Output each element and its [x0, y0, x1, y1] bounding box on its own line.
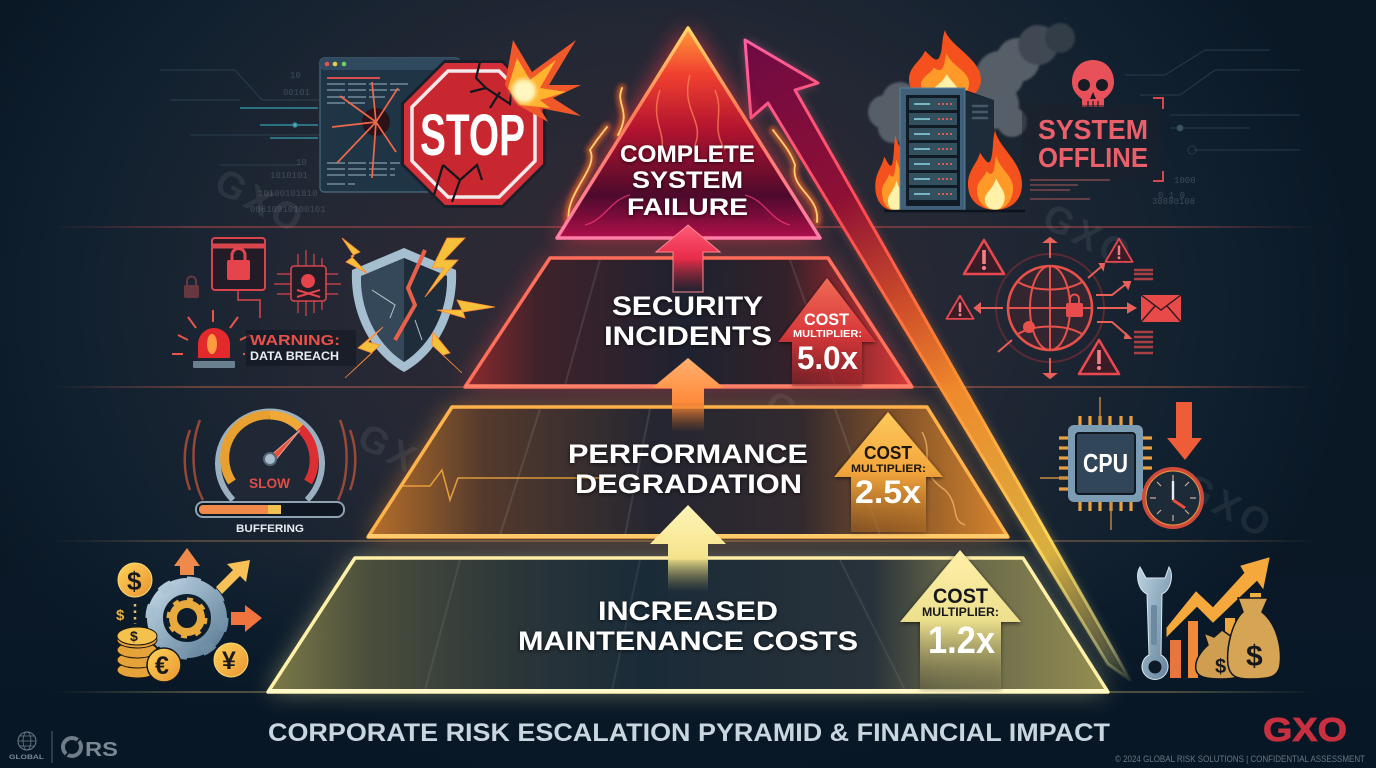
- icon: wrench with rising cost chart: $: [1215, 656, 1226, 678]
- watermarks: GXO: [351, 416, 456, 498]
- horizontal tier divider lines: [50, 227, 1320, 692]
- icon: cpu: CPU: [1083, 448, 1128, 478]
- money bags: [1196, 598, 1280, 679]
- side flames: [568, 88, 817, 228]
- binary code decoration: 10100101010: [258, 189, 317, 199]
- label tier 3: PERFORMANCE: [568, 439, 808, 469]
- watermarks: GXO: [1176, 466, 1281, 548]
- label tier 3: [568, 439, 808, 499]
- watermarks: GXO: [1036, 196, 1141, 278]
- icon: locked browser window: [212, 238, 265, 318]
- watermarks: [208, 161, 1281, 548]
- icon: envelope: [1134, 270, 1181, 353]
- system offline label: SYSTEM: [1038, 114, 1148, 145]
- label tier 1: FAILURE: [627, 194, 748, 221]
- label tier 4: INCREASED: [598, 596, 778, 626]
- center arrow: tier 3 to tier 2: [652, 358, 724, 432]
- icon: warning siren: [172, 310, 250, 368]
- cost arrow 5.0x: [778, 278, 876, 386]
- binary code decoration: [250, 71, 1196, 215]
- cost arrow 2.5x: COST: [864, 443, 912, 463]
- watermarks: GXO: [758, 383, 863, 465]
- teal data light streaks: [240, 108, 318, 138]
- cost arrow 2.5x: 2.5x: [855, 474, 921, 510]
- icon: cracked shield: [342, 238, 495, 378]
- wrench: [1138, 567, 1171, 680]
- icon: cpu: [1040, 397, 1168, 530]
- icon: burning server: [868, 23, 1075, 211]
- escalation arrow behind pyramid: [745, 40, 1130, 680]
- warning triangles: [946, 239, 1133, 374]
- trend arrow: [1167, 558, 1269, 636]
- diagonal arrow: [216, 560, 250, 594]
- logo: global: GLOBAL: [9, 755, 44, 761]
- label tier 1: [620, 141, 755, 221]
- coin stack: [117, 627, 157, 678]
- pyramid: [268, 28, 1130, 692]
- label tier 3: DEGRADATION: [575, 469, 802, 499]
- background circuit traces: [160, 50, 1300, 165]
- binary code decoration: 1010101: [270, 171, 308, 181]
- binary code decoration: 00610910100101: [250, 205, 326, 215]
- binary code decoration: 0 1 0: [1158, 191, 1185, 201]
- center arrow: tier 2 to tier 1: [656, 225, 720, 292]
- cost arrow 5.0x: MULTIPLIER:: [793, 328, 862, 340]
- system offline label: OFFLINE: [1038, 142, 1148, 173]
- cost arrow 1.2x: MULTIPLIER:: [922, 605, 999, 619]
- icon: cost gear with currency: $: [130, 628, 138, 644]
- icon: cost gear with currency: $: [127, 566, 142, 596]
- buffering progress bar: [196, 502, 344, 535]
- smoke: [868, 23, 1075, 143]
- icon: speedometer: SLOW: [249, 476, 290, 491]
- icon: cost gear with currency: [116, 548, 262, 682]
- buffering progress bar: BUFFERING: [236, 523, 304, 535]
- bars: [1170, 640, 1181, 678]
- icon: cost gear with currency: ¥: [222, 647, 236, 675]
- cost arrow 5.0x: 5.0x: [797, 340, 858, 376]
- icon: wrench with rising cost chart: $: [1246, 640, 1263, 673]
- cost arrow 5.0x: COST: [804, 310, 850, 329]
- title: CORPORATE RISK ESCALATION PYRAMID & FINANCIAL IMPACT: [268, 719, 1110, 747]
- icon: wrench with rising cost chart: [1138, 558, 1280, 680]
- cost arrow 2.5x: [834, 412, 943, 532]
- icon: explosion: [505, 40, 581, 122]
- icon: cracked browser window: [320, 58, 460, 192]
- label tier 2: INCIDENTS: [604, 321, 772, 351]
- label tier 2: SECURITY: [612, 291, 763, 321]
- icon: cost gear with currency: €: [155, 652, 169, 680]
- system offline label: [1022, 98, 1163, 199]
- binary code decoration: 10: [290, 71, 301, 81]
- icon: stop sign: STOP: [420, 103, 525, 168]
- watermarks: GXO: [208, 161, 313, 243]
- label tier 4: [518, 596, 858, 656]
- up arrow: [174, 548, 200, 575]
- label tier 4: MAINTENANCE COSTS: [518, 626, 858, 656]
- binary code decoration: 10: [296, 158, 307, 168]
- cost arrow 1.2x: [900, 550, 1021, 690]
- logo: gxo: GXO: [1263, 711, 1347, 748]
- icon: down arrow: [1167, 402, 1202, 460]
- label tier 1: SYSTEM: [632, 167, 743, 194]
- binary code decoration: 1000: [1174, 176, 1196, 186]
- warning data breach label: [246, 330, 356, 366]
- lightning bolts: [342, 238, 495, 378]
- tier 2: security incidents: [465, 258, 912, 387]
- icon: speedometer: [185, 411, 355, 500]
- icon: clock: [1144, 469, 1202, 527]
- tier 4: increased maintenance costs: [268, 550, 1108, 692]
- logo: rs: RS: [85, 739, 118, 761]
- warning data breach label: DATA BREACH: [250, 349, 339, 363]
- binary code decoration: 00101: [283, 88, 310, 98]
- label tier 1: COMPLETE: [620, 141, 755, 168]
- cost arrow 1.2x: 1.2x: [928, 620, 995, 662]
- right arrow: [231, 605, 262, 632]
- warning data breach label: WARNING:: [250, 332, 340, 349]
- icon: cost gear with currency: $: [116, 607, 125, 624]
- footer logos: [9, 731, 118, 763]
- tier 1: complete system failure: [557, 28, 820, 238]
- cost arrow 1.2x: COST: [933, 585, 988, 608]
- icon: stop sign: [401, 60, 546, 208]
- gear: [155, 586, 219, 650]
- binary code decoration: 30880108: [1152, 197, 1195, 207]
- tier 3: performance degradation: [368, 407, 1008, 537]
- cost arrow 2.5x: MULTIPLIER:: [851, 463, 926, 475]
- icon: skull: [1072, 60, 1114, 107]
- label tier 2: [604, 291, 772, 351]
- spreading arrows: [978, 240, 1130, 376]
- icon: compromised globe: [975, 238, 1135, 378]
- center arrow: tier 4 to tier 3: [650, 505, 726, 592]
- ecg line: [400, 470, 600, 500]
- icon: small padlock: [184, 276, 199, 298]
- icon: malware chip: [274, 250, 341, 316]
